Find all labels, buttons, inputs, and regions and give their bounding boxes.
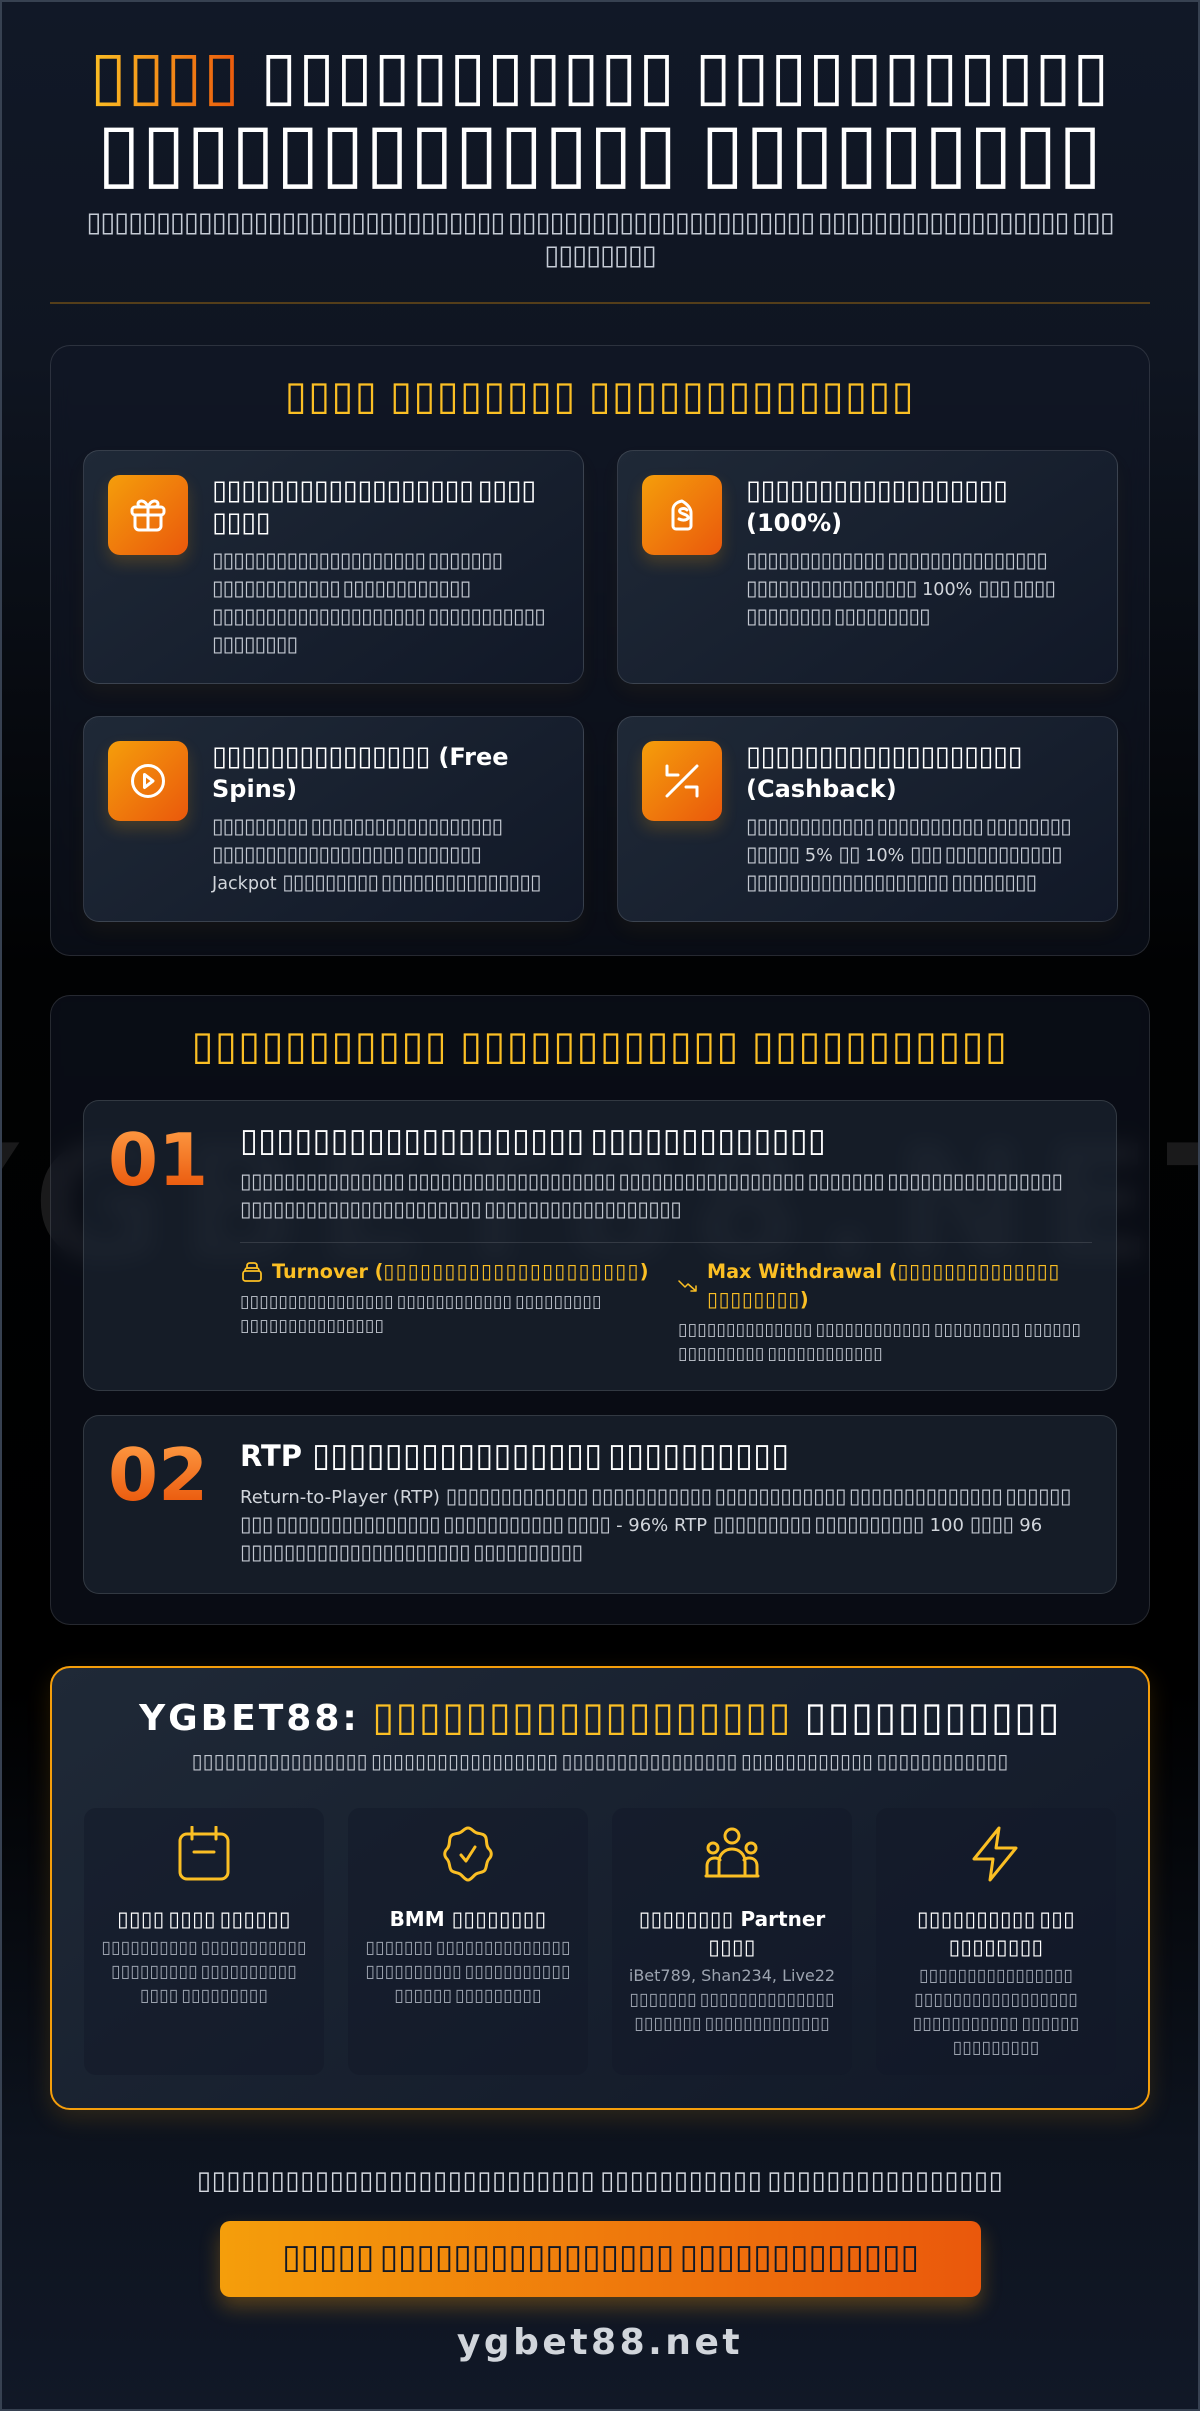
card body: ▯▯▯▯▯▯▯▯▯▯▯▯ ▯▯▯▯▯▯▯▯▯▯▯▯	[212, 576, 470, 600]
card body: ▯▯▯▯▯▯▯▯▯▯▯▯ ▯▯▯▯▯▯▯▯▯▯ ▯▯▯▯▯▯▯▯	[746, 814, 1071, 838]
feature description	[365, 1938, 571, 2006]
card body	[212, 548, 545, 656]
step 02	[83, 1415, 1117, 1594]
heading: why ygbet88: YGBET88: ▯▯▯▯▯▯▯▯▯▯▯▯▯▯▯▯▯▯ ▯▯▯▯▯▯▯▯▯▯▯	[139, 1694, 1061, 1740]
card title	[212, 474, 536, 538]
card title	[212, 740, 509, 803]
card body: ▯▯▯▯▯▯▯▯▯▯▯▯▯▯▯▯▯▯▯▯ ▯▯▯▯▯▯▯	[212, 548, 502, 572]
card title	[746, 740, 1022, 803]
max withdrawal heading: Max Withdrawal (▯▯▯▯▯▯▯▯▯▯▯▯▯▯	[707, 1259, 1060, 1283]
card title: ▯▯▯▯	[212, 506, 270, 538]
card: deposit bonus	[617, 450, 1118, 684]
call to action button: ▯▯▯▯▯ ▯▯▯▯▯▯▯▯▯▯▯▯▯▯▯▯ ▯▯▯▯▯▯▯▯▯▯▯▯▯	[282, 2237, 919, 2277]
card body: ▯▯▯▯▯▯▯▯▯▯▯▯▯ ▯▯▯▯▯▯▯▯▯▯▯▯▯▯▯	[746, 548, 1047, 572]
divider	[50, 302, 1150, 304]
card title: ▯▯▯▯▯▯▯▯▯▯▯▯▯▯▯▯▯▯▯	[746, 740, 1022, 772]
intro text: ▯▯▯▯▯▯▯▯▯▯▯▯▯▯▯▯ ▯▯▯▯▯▯▯▯▯▯▯▯▯▯▯▯▯ ▯▯▯▯▯▯▯▯▯▯▯▯▯▯▯▯ ▯▯▯▯▯▯▯▯▯▯▯▯ ▯▯▯▯▯▯▯▯▯▯▯▯	[192, 1749, 1008, 1773]
feature description: ▯▯▯▯▯▯▯ ▯▯▯▯▯▯▯▯▯▯▯▯▯▯	[629, 1990, 835, 2010]
max withdrawal text: ▯▯▯▯▯▯▯▯▯ ▯▯▯▯▯▯▯▯▯▯▯▯	[678, 1344, 883, 1364]
feature description: iBet789, Shan234, Live22	[629, 1966, 835, 1985]
feature description: ▯▯▯▯▯▯▯▯▯ ▯▯▯▯▯▯▯▯▯▯	[111, 1962, 297, 1982]
card body: ▯▯▯▯▯▯▯▯	[212, 632, 297, 656]
step body	[240, 1169, 1062, 1221]
title: ▯▯▯▯▯▯▯▯▯▯▯▯▯ ▯▯▯▯▯▯▯▯▯	[97, 105, 1103, 198]
card title: (100%)	[746, 509, 842, 537]
icon: coins	[242, 1262, 262, 1282]
panel: terms	[50, 995, 1150, 1625]
feature description: ▯▯▯▯▯▯▯▯▯	[953, 2038, 1039, 2058]
icon: lightning	[972, 1826, 1018, 1882]
step body: ▯▯▯▯▯▯▯▯▯▯▯▯▯▯▯ ▯▯▯▯▯▯▯▯▯▯▯▯▯▯▯▯▯▯▯ ▯▯▯▯▯▯▯▯▯▯▯▯▯▯▯▯▯ ▯▯▯▯▯▯▯ ▯▯▯▯▯▯▯▯▯▯▯▯▯▯▯▯	[240, 1169, 1062, 1193]
card body: ▯▯▯▯▯▯▯▯▯▯▯▯▯▯▯▯ 100% ▯▯▯ ▯▯▯▯	[746, 576, 1055, 600]
feature title	[917, 1907, 1075, 1959]
feature: partners	[612, 1808, 852, 2075]
feature description: ▯▯▯▯ ▯▯▯▯▯▯▯▯▯	[140, 1986, 268, 2006]
feature description: ▯▯▯▯▯▯▯ ▯▯▯▯▯▯▯▯▯▯▯▯▯	[634, 2014, 830, 2034]
icon: badge check	[443, 1826, 493, 1882]
card body: ▯▯▯▯▯▯▯▯▯ ▯▯▯▯▯▯▯▯▯▯▯▯▯▯▯▯▯▯	[212, 814, 502, 838]
max withdrawal heading	[707, 1259, 1060, 1311]
card title: ▯▯▯▯▯▯▯▯▯▯▯▯▯▯▯▯▯▯ ▯▯▯▯	[212, 474, 536, 506]
card title: (Cashback)	[746, 775, 897, 803]
divider	[240, 1242, 1092, 1243]
icon: calendar	[178, 1826, 230, 1880]
card body	[746, 548, 1055, 628]
icon: play circle	[108, 741, 188, 821]
panel: why ygbet88	[50, 1666, 1150, 2110]
feature description: ▯▯▯▯▯▯▯▯▯▯▯▯▯▯▯▯	[919, 1966, 1073, 1986]
step title: ▯▯▯▯▯▯▯▯▯▯▯▯▯▯▯▯▯▯▯ ▯▯▯▯▯▯▯▯▯▯▯▯▯	[240, 1121, 826, 1159]
feature description: ▯▯▯▯▯▯▯▯▯▯ ▯▯▯▯▯▯▯▯▯▯▯	[101, 1938, 307, 1958]
feature description	[101, 1938, 307, 2006]
card body: ▯▯▯▯▯▯▯▯▯▯▯▯▯▯▯▯▯▯ ▯▯▯▯▯▯▯	[212, 842, 481, 866]
feature: fast service	[876, 1808, 1116, 2075]
title	[90, 36, 1110, 198]
heading: terms: ▯▯▯▯▯▯▯▯▯▯▯ ▯▯▯▯▯▯▯▯▯▯▯▯ ▯▯▯▯▯▯▯▯▯▯▯	[192, 1023, 1008, 1069]
call to action button	[220, 2221, 981, 2297]
step 01	[83, 1100, 1117, 1391]
icon: trend down	[678, 1280, 697, 1292]
max withdrawal note	[678, 1259, 1081, 1364]
max withdrawal text	[678, 1320, 1081, 1364]
max withdrawal heading: ▯▯▯▯▯▯▯▯)	[707, 1287, 809, 1311]
subtitle: ▯▯▯▯▯▯▯▯▯▯▯▯▯▯▯▯▯▯▯▯▯▯▯▯▯▯▯▯▯▯ ▯▯▯▯▯▯▯▯▯▯▯▯▯▯▯▯▯▯▯▯▯▯ ▯▯▯▯▯▯▯▯▯▯▯▯▯▯▯▯▯▯ ▯▯▯	[86, 206, 1114, 238]
step body: ▯▯▯ ▯▯▯▯▯▯▯▯▯▯▯▯▯▯▯ ▯▯▯▯▯▯▯▯▯▯▯ ▯▯▯▯ - 96% RTP ▯▯▯▯▯▯▯▯▯ ▯▯▯▯▯▯▯▯▯▯ 100 ▯▯▯▯ 96	[240, 1512, 1042, 1536]
card body	[746, 814, 1071, 894]
card body: ▯▯▯▯▯▯▯▯▯▯▯▯▯▯▯▯▯▯▯▯ ▯▯▯▯▯▯▯▯▯▯▯	[212, 604, 545, 628]
feature title: ▯▯▯▯ ▯▯▯▯ ▯▯▯▯▯▯	[117, 1907, 291, 1931]
feature title: ▯▯▯▯▯▯▯▯	[949, 1935, 1043, 1959]
feature description	[913, 1966, 1079, 2058]
heading: bonus types: ▯▯▯▯ ▯▯▯▯▯▯▯▯ ▯▯▯▯▯▯▯▯▯▯▯▯▯▯	[285, 373, 915, 419]
max withdrawal text: ▯▯▯▯▯▯▯▯▯▯▯▯▯▯ ▯▯▯▯▯▯▯▯▯▯▯▯ ▯▯▯▯▯▯▯▯▯ ▯▯▯▯▯▯	[678, 1320, 1081, 1340]
feature description: ▯▯▯▯▯▯ ▯▯▯▯▯▯▯▯▯	[394, 1986, 542, 2006]
card: welcome bonus	[83, 450, 584, 684]
card body: ▯▯▯▯▯ 5% ▯▯ 10% ▯▯▯ ▯▯▯▯▯▯▯▯▯▯▯	[746, 842, 1062, 866]
feature description: ▯▯▯▯▯▯▯▯▯▯▯▯▯▯▯▯▯	[914, 1990, 1078, 2010]
step body: ▯▯▯▯▯▯▯▯▯▯▯▯▯▯▯▯▯▯▯▯▯▯ ▯▯▯▯▯▯▯▯▯▯▯▯▯▯▯▯▯▯	[240, 1197, 681, 1221]
feature description: ▯▯▯▯▯▯▯▯▯▯▯ ▯▯▯▯▯▯	[913, 2014, 1079, 2034]
feature: support	[84, 1808, 324, 2075]
card body: ▯▯▯▯▯▯▯▯ ▯▯▯▯▯▯▯▯▯	[746, 604, 930, 628]
step body	[240, 1484, 1071, 1564]
turnover heading: Turnover (▯▯▯▯▯▯▯▯▯▯▯▯▯▯▯▯▯▯▯▯▯)	[272, 1259, 648, 1283]
card: cashback	[617, 716, 1118, 922]
website url: ygbet88.net	[457, 2322, 743, 2363]
panel: bonus types	[50, 345, 1150, 956]
turnover note	[240, 1259, 648, 1336]
card body: Jackpot ▯▯▯▯▯▯▯▯▯ ▯▯▯▯▯▯▯▯▯▯▯▯▯▯▯	[212, 870, 541, 894]
feature: BMM	[348, 1808, 588, 2075]
icon: gift	[108, 475, 188, 555]
title: ▯▯▯▯ ▯▯▯▯▯▯▯▯▯▯▯ ▯▯▯▯▯▯▯▯▯▯▯	[90, 36, 1110, 114]
step body: ▯▯▯▯▯▯▯▯▯▯▯▯▯▯▯▯▯▯▯▯▯ ▯▯▯▯▯▯▯▯▯▯	[240, 1540, 583, 1564]
card title: ▯▯▯▯▯▯▯▯▯▯▯▯▯▯▯ (Free	[212, 740, 509, 772]
card title	[746, 474, 1008, 537]
feature description	[629, 1966, 835, 2034]
icon: users	[704, 1828, 760, 1878]
feature title	[639, 1907, 826, 1959]
card title: ▯▯▯▯▯▯▯▯▯▯▯▯▯▯▯▯▯▯	[746, 474, 1008, 506]
turnover text: ▯▯▯▯▯▯▯▯▯▯▯▯▯▯▯▯ ▯▯▯▯▯▯▯▯▯▯▯▯ ▯▯▯▯▯▯▯▯▯	[240, 1292, 602, 1312]
card body	[211, 814, 541, 894]
feature title: ▯▯▯▯▯▯▯▯ Partner	[639, 1907, 825, 1931]
turnover text: ▯▯▯▯▯▯▯▯▯▯▯▯▯▯▯	[240, 1316, 384, 1336]
number 01: 01	[108, 1118, 208, 1202]
subtitle: ▯▯▯▯▯▯▯▯	[544, 239, 656, 271]
card title: Spins)	[212, 775, 297, 803]
card body: ▯▯▯▯▯▯▯▯▯▯▯▯▯▯▯▯▯▯▯ ▯▯▯▯▯▯▯▯	[746, 870, 1036, 894]
feature title: ▯▯▯▯▯▯▯▯▯▯ ▯▯▯	[917, 1907, 1075, 1931]
feature description: ▯▯▯▯▯▯▯ ▯▯▯▯▯▯▯▯▯▯▯▯▯▯	[365, 1938, 571, 1958]
subtitle	[86, 206, 1114, 271]
closing text: ▯▯▯▯▯▯▯▯▯▯▯▯▯▯▯▯▯▯▯▯▯▯▯▯▯▯▯ ▯▯▯▯▯▯▯▯▯▯▯ ▯▯▯▯▯▯▯▯▯▯▯▯▯▯▯▯	[197, 2166, 1003, 2196]
icon: money bag	[642, 475, 722, 555]
step body: Return-to-Player (RTP) ▯▯▯▯▯▯▯▯▯▯▯▯▯ ▯▯▯▯▯▯▯▯▯▯▯ ▯▯▯▯▯▯▯▯▯▯▯▯ ▯▯▯▯▯▯▯▯▯▯▯▯▯▯ ▯▯▯▯▯▯	[240, 1484, 1071, 1508]
turnover text	[240, 1292, 602, 1336]
feature title: ▯▯▯▯	[708, 1935, 756, 1959]
feature description: ▯▯▯▯▯▯▯▯▯▯ ▯▯▯▯▯▯▯▯▯▯▯	[365, 1962, 571, 1982]
card: free spins	[83, 716, 584, 922]
icon: percent	[642, 741, 722, 821]
number 02: 02	[108, 1433, 208, 1517]
step title: RTP ▯▯▯▯▯▯▯▯▯▯▯▯▯▯▯▯ ▯▯▯▯▯▯▯▯▯▯	[240, 1436, 789, 1474]
feature title: BMM ▯▯▯▯▯▯▯▯	[390, 1907, 546, 1931]
